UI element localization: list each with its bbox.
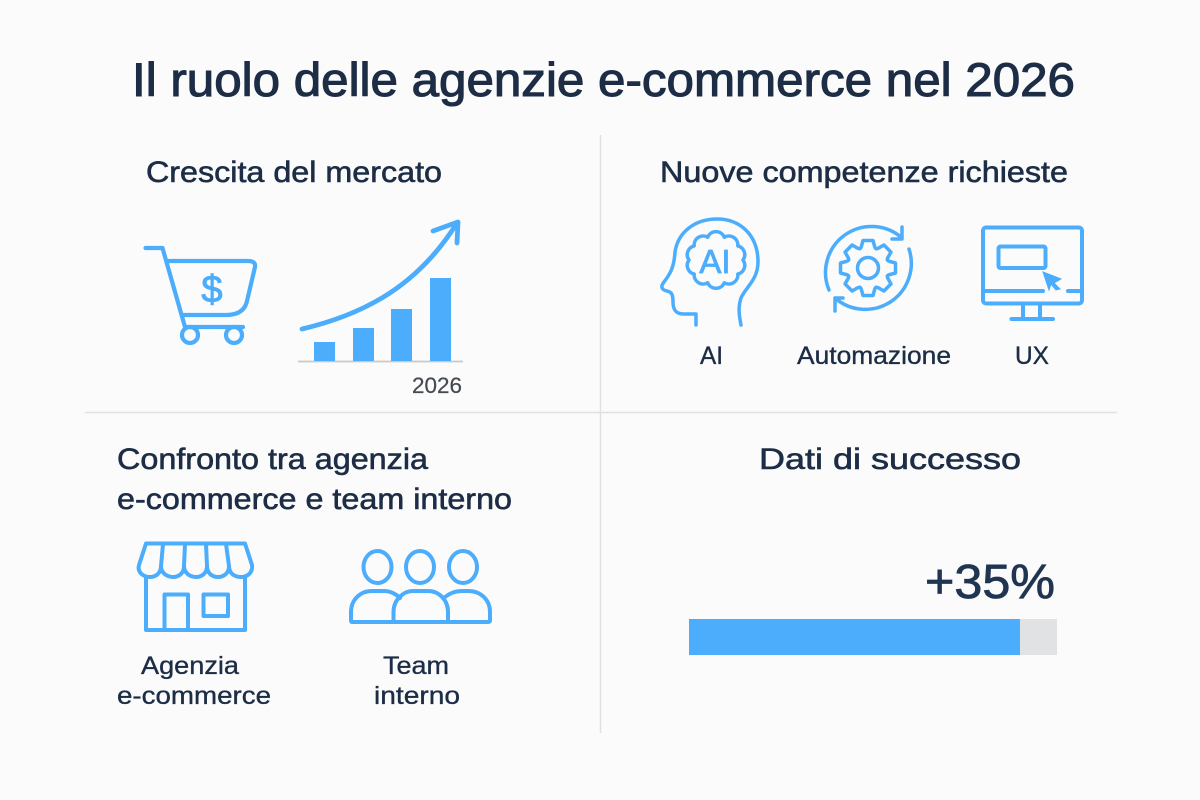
label: team interno: interno [374, 682, 460, 710]
arrow: growth curve [302, 222, 458, 329]
label: agenzia e-commerce: e-commerce [117, 682, 271, 710]
label: agenzia e-commerce [117, 652, 271, 710]
label: agenzia e-commerce: Agenzia [141, 652, 239, 680]
label: AI: AI [700, 342, 723, 370]
panel: nuove competenze richieste [660, 156, 1082, 370]
icon: store [139, 544, 252, 630]
panel: crescita del mercato [146, 156, 463, 398]
icon: team [351, 551, 490, 622]
stat: +35%: +35% [925, 556, 1055, 609]
icon: AI head: AI [699, 243, 731, 280]
heading: confronto: e-commerce e team interno [117, 483, 512, 516]
icon: shopping cart: $ [201, 269, 223, 311]
icon: UX monitor [983, 228, 1082, 319]
heading: crescita del mercato: Crescita del mercato [146, 156, 442, 189]
axis label: 2026 [412, 373, 462, 398]
panel: dati di successo [689, 443, 1057, 655]
label: team interno: Team [383, 652, 449, 680]
icon: automation gear [826, 226, 911, 311]
progress bar [689, 619, 1057, 655]
icon: AI head [662, 219, 758, 325]
heading: confronto: Confronto tra agenzia [117, 443, 428, 476]
label: Automazione: Automazione [797, 342, 951, 370]
label: UX: UX [1015, 342, 1049, 370]
heading: dati di successo: Dati di successo [759, 443, 1021, 476]
bar chart: growth to 2026 [298, 222, 463, 398]
panel: confronto [117, 443, 512, 710]
heading: confronto [117, 443, 512, 516]
heading: nuove competenze: Nuove competenze richieste [660, 156, 1068, 189]
title: Il ruolo delle agenzie e-commerce nel 2026 [132, 53, 1075, 106]
label: team interno [374, 652, 460, 710]
icon: shopping cart [146, 248, 255, 343]
